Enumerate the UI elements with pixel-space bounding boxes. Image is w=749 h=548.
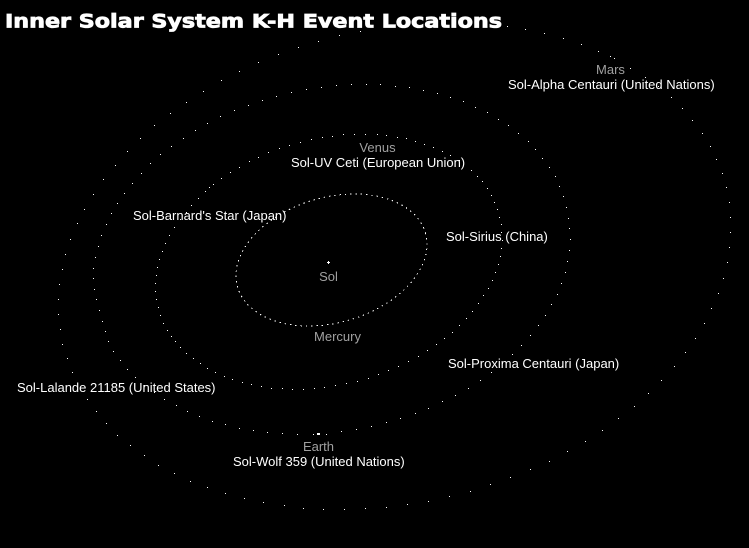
label: Mars with route <box>508 62 715 92</box>
label: Earth with route: Sol-Wolf 359 (United Nations) <box>233 454 405 469</box>
title: Inner Solar System K-H Event Locations <box>5 12 502 32</box>
label: Sol-Lalande 21185 route: Sol-Lalande 21185 (United States) <box>17 380 216 395</box>
label: Venus with route <box>291 140 465 170</box>
orbit: Mars <box>58 26 731 510</box>
label: Mars with route: Mars <box>596 62 625 77</box>
label: Sol-Barnard's Star route: Sol-Barnard's Star (Japan) <box>133 208 286 223</box>
icon: Earth marker <box>317 433 320 435</box>
orbit: Venus <box>155 134 503 390</box>
label: Sol-Proxima Centauri route: Sol-Proxima Centauri (Japan) <box>448 356 619 371</box>
icon: Mars marker <box>610 56 611 57</box>
orbit: Earth <box>93 84 571 434</box>
label: Venus with route: Venus <box>359 140 396 155</box>
label: Mercury: Mercury <box>314 329 361 344</box>
icon: Sol marker <box>327 261 330 264</box>
label: Venus with route: Sol-UV Ceti (European Union) <box>291 155 465 170</box>
label: Mars with route: Sol-Alpha Centauri (United Nations) <box>508 77 715 92</box>
label: Sol: Sol <box>319 269 338 284</box>
label: Earth with route: Earth <box>303 439 334 454</box>
label: Earth with route <box>233 439 405 469</box>
orbit: Mercury <box>236 194 427 326</box>
label: Sol-Sirius route: Sol-Sirius (China) <box>446 229 548 244</box>
